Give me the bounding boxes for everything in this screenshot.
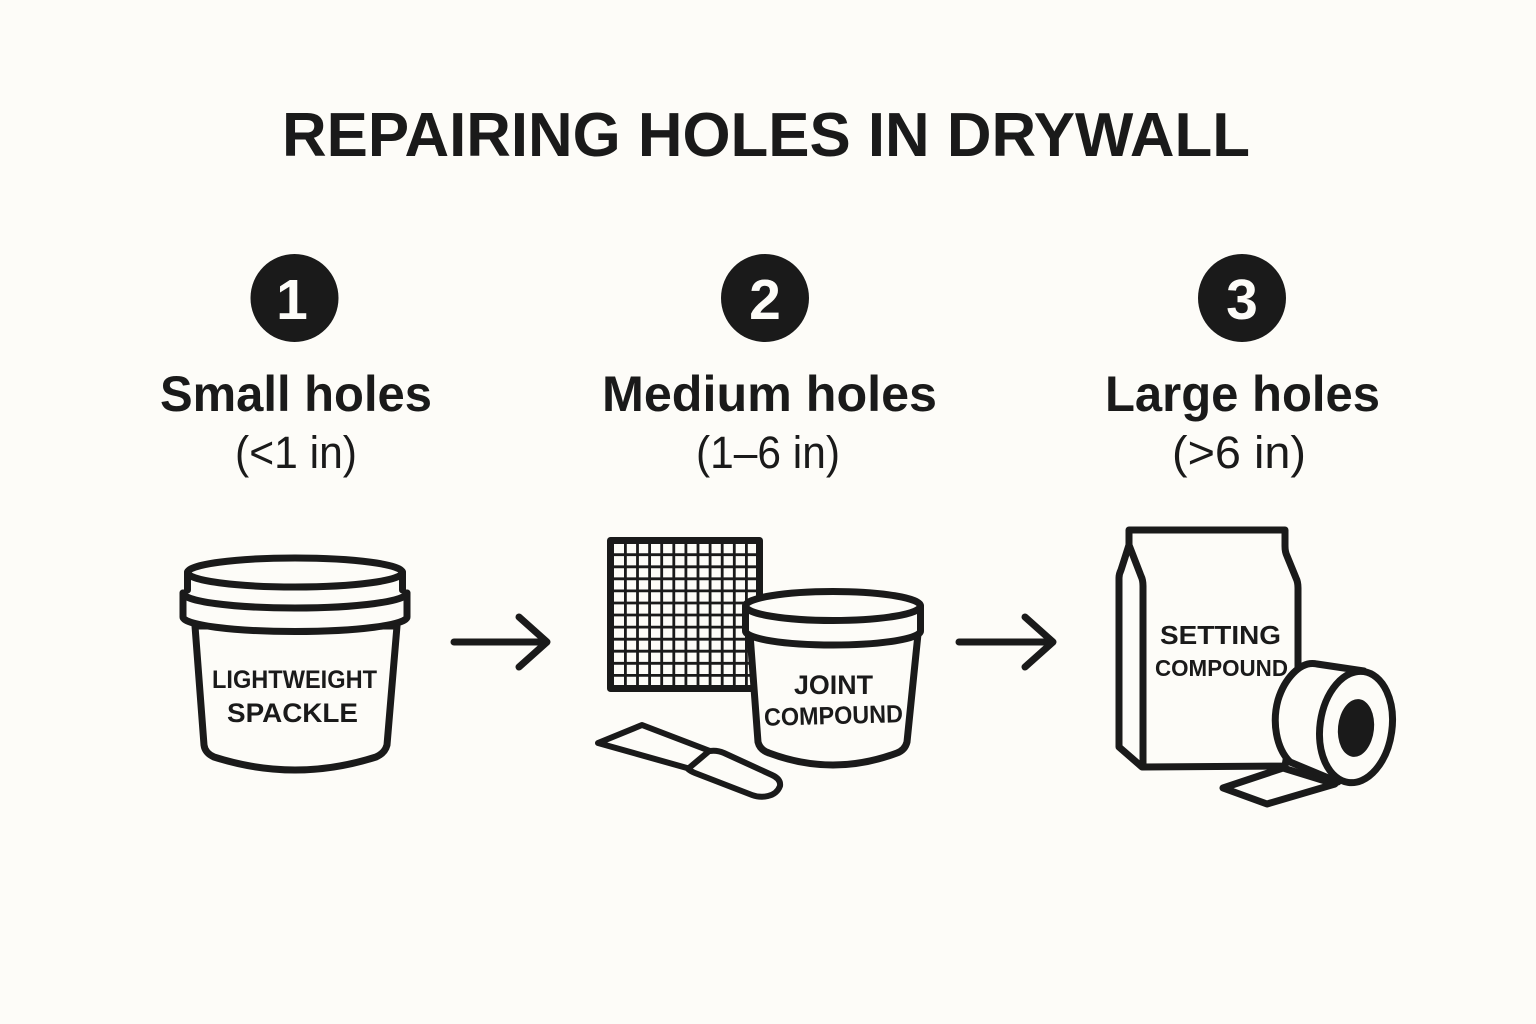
- number badge 3: 3: [1226, 268, 1258, 332]
- step 3: large holes: [1105, 254, 1399, 804]
- size range: under 1 inch: (<1 in): [235, 427, 357, 478]
- number badge 1: [250, 254, 338, 342]
- tub label: COMPOUND: [764, 700, 903, 732]
- arrow: step 2 to step 3: [959, 617, 1053, 667]
- icon: mesh patch: [610, 540, 760, 689]
- title: REPAIRING HOLES IN DRYWALL: [282, 101, 1250, 170]
- bag label: [1155, 620, 1288, 681]
- step 1: small holes: [160, 254, 432, 770]
- arrow: step 1 to step 2: [454, 617, 547, 667]
- icon: drywall tape roll: [1223, 663, 1399, 804]
- bag label: COMPOUND: [1155, 655, 1288, 681]
- step 2: medium holes: [598, 254, 937, 797]
- tub label: [212, 666, 377, 728]
- size range: over 6 inches: (>6 in): [1172, 427, 1306, 478]
- heading: medium holes: Medium holes: [602, 366, 937, 422]
- icon: lightweight spackle tub: [183, 558, 407, 770]
- size range: 1 to 6 inches: (1–6 in): [696, 427, 840, 478]
- tub label: JOINT: [794, 670, 873, 700]
- number badge 2: [721, 254, 809, 342]
- tub label: LIGHTWEIGHT: [212, 666, 377, 694]
- number badge 2: 2: [749, 268, 781, 332]
- heading: large holes: Large holes: [1105, 366, 1380, 422]
- tub label: SPACKLE: [227, 698, 358, 728]
- icon: setting compound bag: [1119, 530, 1298, 767]
- heading: small holes: Small holes: [160, 366, 432, 422]
- tub label: [764, 670, 903, 732]
- icon: putty knife: [598, 725, 780, 797]
- icon: joint compound tub: [746, 592, 920, 765]
- number badge 3: [1198, 254, 1286, 342]
- bag label: SETTING: [1160, 620, 1281, 650]
- number badge 1: 1: [276, 268, 308, 332]
